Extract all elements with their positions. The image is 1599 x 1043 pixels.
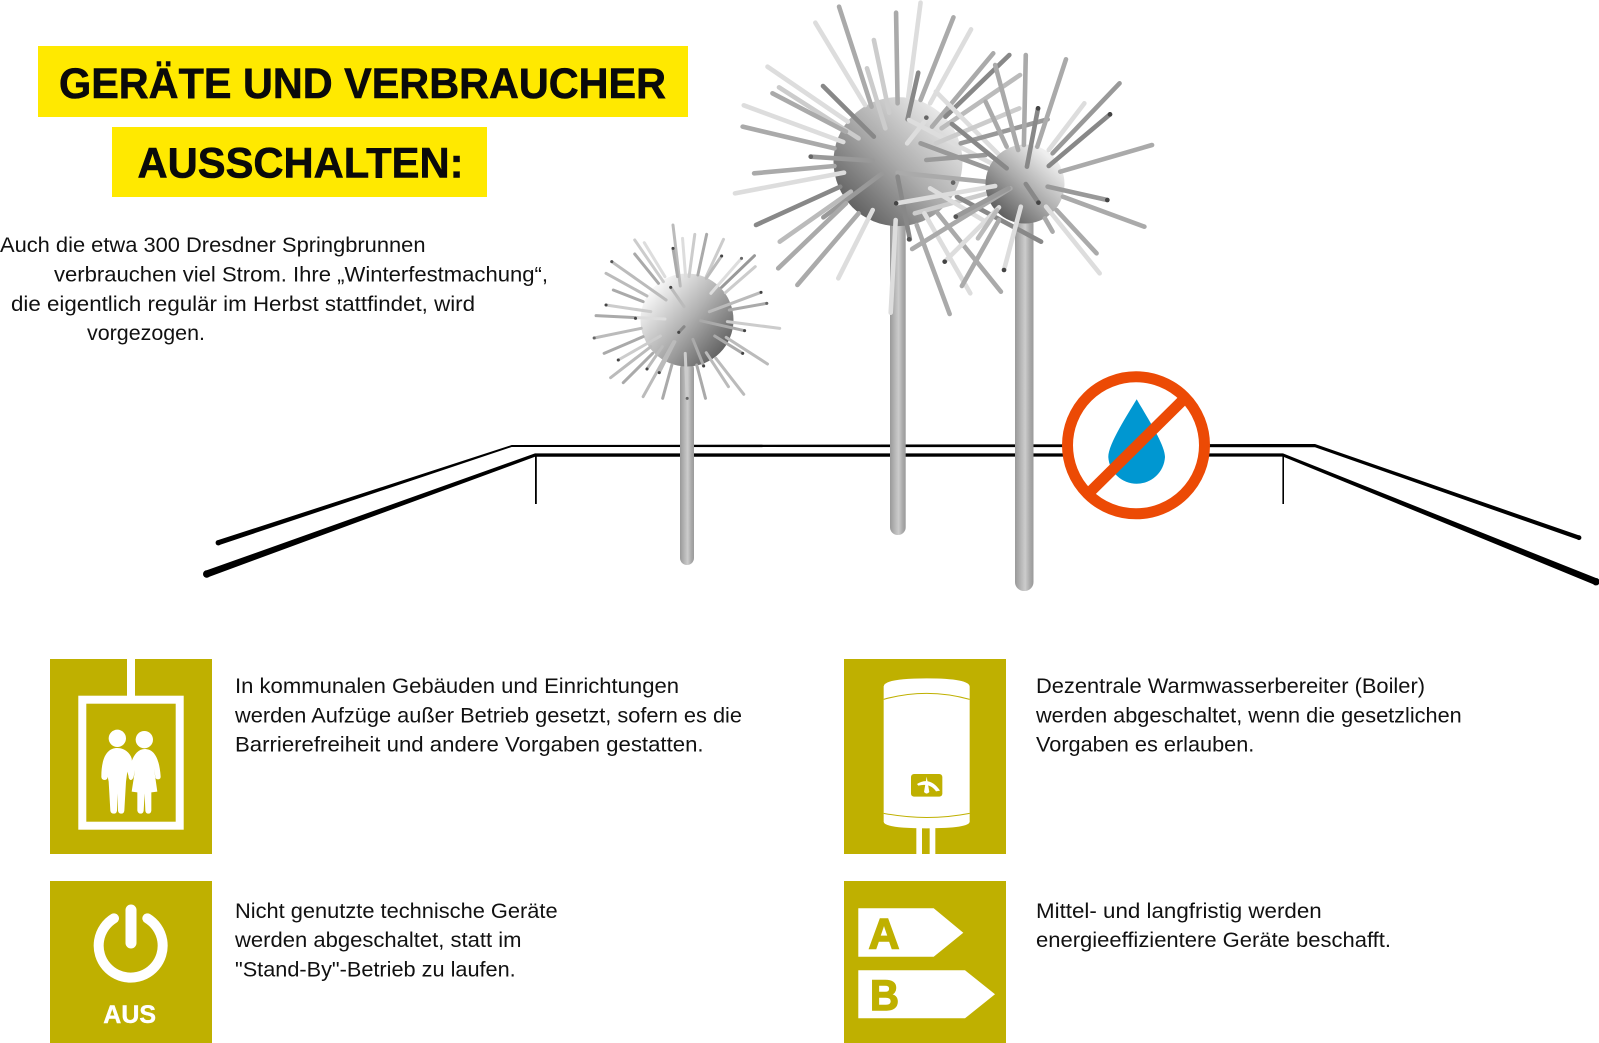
icon: energy labels: B [870, 972, 899, 1020]
spikes [896, 55, 1152, 286]
spikes [735, 3, 1048, 314]
text: standby: werden abgeschaltet, statt im [234, 929, 521, 952]
pole [1015, 215, 1034, 591]
title [38, 46, 688, 197]
text: boiler [1035, 675, 1462, 756]
icon: power off [50, 881, 212, 1043]
text: efficiency: energieeffizientere Geräte beschafft. [1036, 929, 1391, 952]
icon: water drop [1108, 399, 1165, 484]
fountain: right [896, 55, 1152, 591]
basin outline [203, 444, 1599, 585]
title line 2 [112, 127, 487, 197]
text: efficiency [1036, 900, 1391, 952]
title line 1: GERÄTE UND VERBRAUCHER [59, 60, 666, 108]
pole [890, 218, 906, 535]
text: elevators [234, 675, 742, 757]
title line 2: AUSSCHALTEN: [138, 140, 464, 188]
intro text: vorgezogen. [87, 322, 205, 345]
intro text: Auch die etwa 300 Dresdner Springbrunnen [0, 234, 426, 257]
intro text [0, 234, 548, 345]
fountain: large middle [735, 3, 1048, 535]
text: standby [234, 900, 558, 981]
sphere [640, 274, 734, 366]
icon: energy labels [844, 881, 1006, 1043]
text: standby: "Stand-By"-Betrieb zu laufen. [235, 958, 516, 981]
icon: no water sign [1068, 377, 1204, 514]
panel: boiler [844, 659, 1462, 854]
title line 1 [38, 46, 688, 117]
spikes [594, 225, 780, 398]
text: efficiency: Mittel- und langfristig werden [1036, 900, 1322, 923]
pole [680, 362, 694, 565]
intro text: verbrauchen viel Strom. Ihre „Winterfestmachung“, [54, 264, 548, 286]
text: elevators: werden Aufzüge außer Betrieb gesetzt, sofern es die [234, 704, 742, 727]
panel: standby [50, 881, 558, 1043]
text: elevators: In kommunalen Gebäuden und Einrichtungen [235, 675, 679, 698]
fountain: small left [594, 225, 780, 565]
text: boiler: werden abgeschaltet, wenn die gesetzlichen [1035, 704, 1462, 727]
prohibition bar [1090, 400, 1183, 492]
icon: boiler [844, 659, 1006, 854]
text: standby: Nicht genutzte technische Geräte [235, 900, 558, 923]
text: boiler: Vorgaben es erlauben. [1036, 733, 1254, 756]
intro text: die eigentlich regulär im Herbst stattfindet, wird [11, 293, 475, 316]
text: elevators: Barrierefreiheit und andere Vorgaben gestatten. [235, 734, 704, 757]
icon: elevator [50, 659, 212, 854]
sphere [834, 97, 962, 226]
icon: energy labels: A [868, 910, 900, 958]
icon: power off: AUS [103, 1001, 156, 1029]
panel: efficiency [844, 881, 1391, 1043]
sphere [986, 144, 1064, 224]
text: boiler: Dezentrale Warmwasserbereiter (Boiler) [1036, 675, 1425, 698]
panel: elevators [50, 659, 742, 854]
